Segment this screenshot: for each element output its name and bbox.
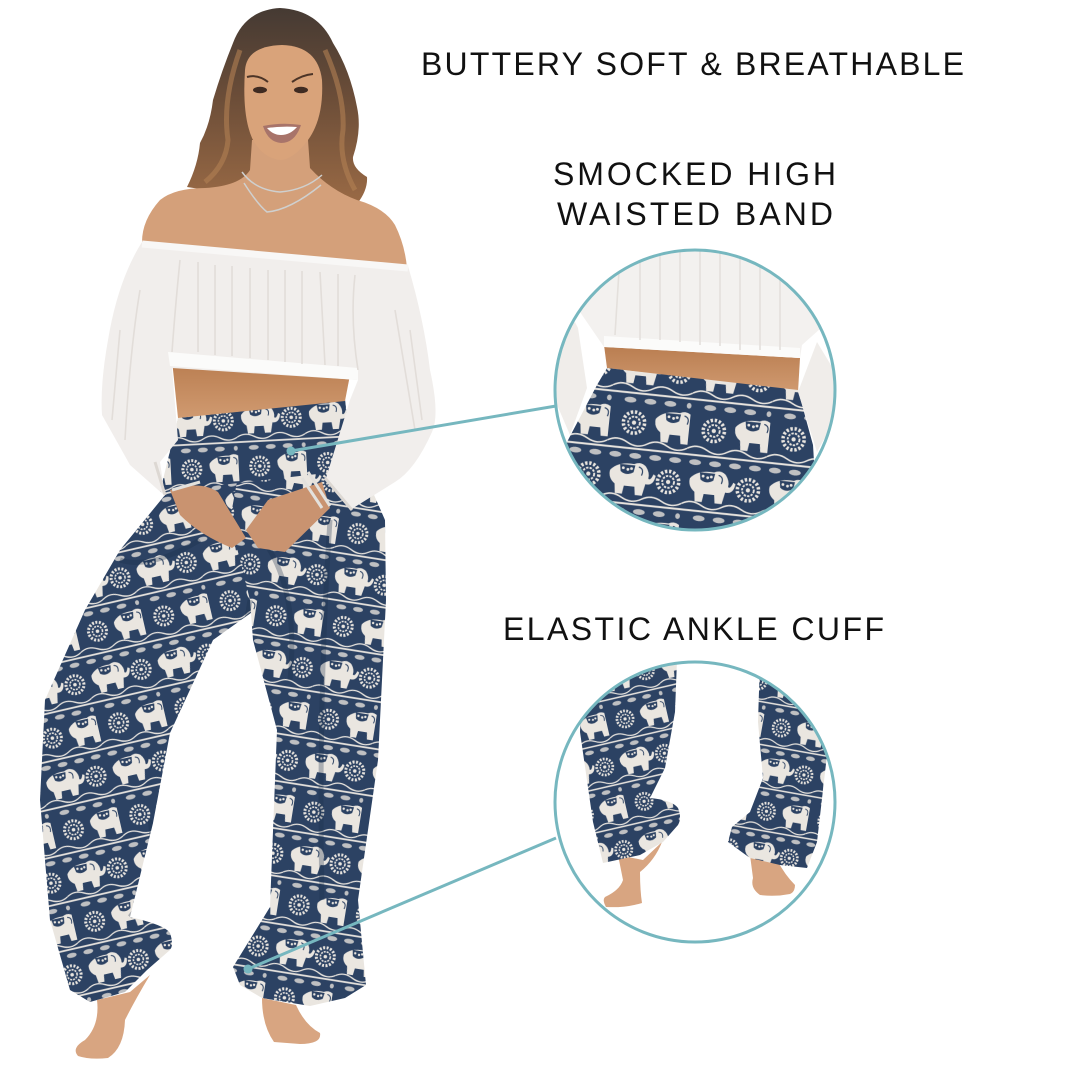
facial features: [247, 74, 313, 143]
heading: buttery soft: BUTTERY SOFT & BREATHABLE: [421, 46, 964, 82]
heading: smocked waistband: SMOCKED HIGH: [553, 156, 836, 192]
bracelets: [172, 472, 330, 508]
smocked waistband: [160, 400, 352, 492]
left pant leg: [40, 418, 262, 1002]
left foot: [76, 975, 150, 1059]
face: [244, 45, 322, 160]
necklaces: [242, 172, 322, 212]
callout line: ankle cuff: [244, 838, 556, 974]
hair: [187, 8, 367, 204]
heading: smocked waistband: [553, 156, 836, 232]
heading: smocked waistband: WAISTED BAND: [557, 196, 833, 232]
blouse: [102, 242, 436, 510]
neck and shoulders: [142, 140, 407, 268]
right foot: [262, 998, 320, 1044]
detail circle: ankle cuff: [555, 660, 835, 942]
pant folds: [120, 520, 330, 917]
hands: [170, 482, 330, 552]
midriff: [172, 360, 350, 418]
detail circle: waistband: [554, 248, 836, 532]
right pant leg: [230, 400, 386, 1006]
hair highlights: [205, 50, 355, 190]
callout line: waistband: [286, 406, 556, 456]
heading: ankle cuff: ELASTIC ANKLE CUFF: [503, 611, 884, 647]
model figure: [40, 8, 436, 1059]
